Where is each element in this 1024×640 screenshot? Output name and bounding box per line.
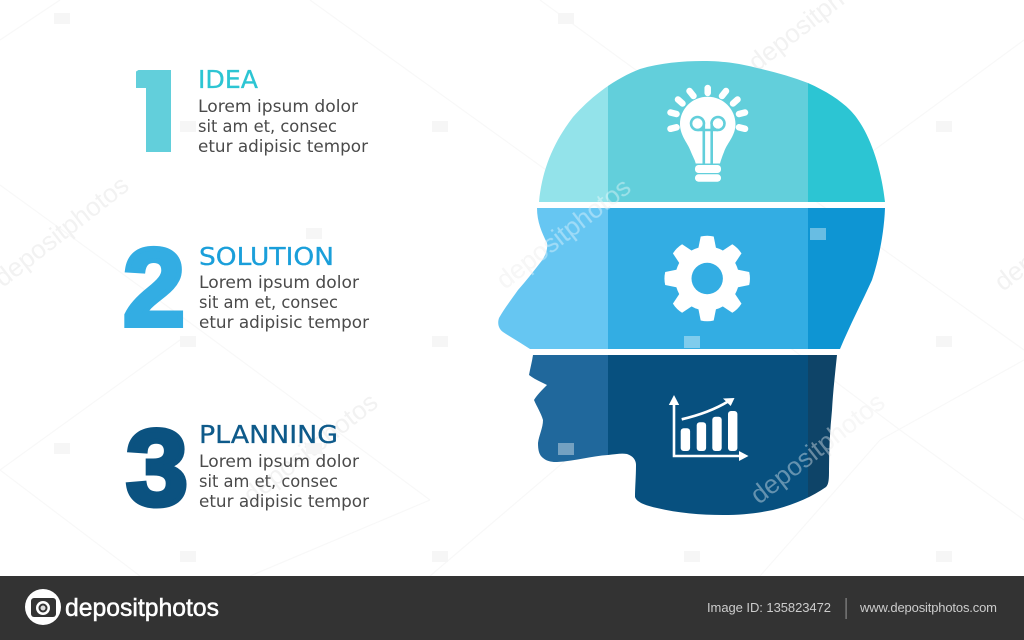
watermark: background marks: depositphotos [237,386,383,510]
heading: solution: SOLUTION [199,242,334,271]
text: solution body: sit am et, consec [199,293,338,313]
number 2: 2 [123,226,185,350]
text: planning body: sit am et, consec [199,472,338,492]
text: solution body: Lorem ipsum dolor [199,273,359,293]
item 2: solution [123,226,369,350]
watermark: background marks: depositphotos [490,171,636,295]
text: idea body: etur adipisic tempor [198,137,368,157]
text: planning body: etur adipisic tempor [199,492,369,512]
text: solution body [199,273,369,333]
text: idea body: sit am et, consec [198,117,337,137]
watermark: over head: depositphotos [490,171,636,295]
icon: bar chart [669,395,748,461]
heading: planning: PLANNING [199,420,338,449]
number 1: 1 [124,51,186,174]
head: bottom segment [529,355,837,515]
heading: idea: IDEA [198,65,258,94]
logo wordmark: depositphotos [65,594,219,622]
text: idea body: Lorem ipsum dolor [198,97,358,117]
number 3: 3 [126,407,188,528]
icon: gear [664,236,750,321]
watermark: over head: depositphotos [744,386,890,510]
watermark: over head [490,171,890,510]
text: idea body [198,97,368,157]
item 3: planning [126,407,369,528]
text: solution body: etur adipisic tempor [199,313,369,333]
watermark: background marks: depositphotos [744,386,890,510]
footer bar [0,576,1024,640]
head: middle segment [498,208,885,349]
icon: camera logo [25,589,61,625]
image id: Image ID: 135823472 [707,600,831,615]
head: top segment [539,61,885,202]
text: planning body: Lorem ipsum dolor [199,452,359,472]
text: planning body [199,452,369,512]
footer divider [846,598,847,619]
icon: light bulb [670,88,745,182]
website url: www.depositphotos.com [859,600,997,615]
item 1: idea [136,70,368,156]
